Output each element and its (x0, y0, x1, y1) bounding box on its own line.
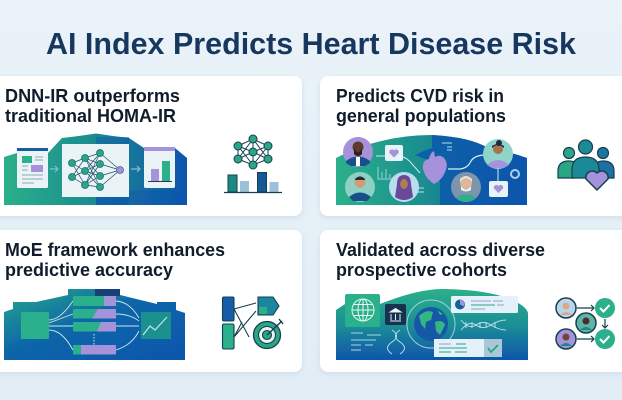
heading: CVD risk: general populations (336, 106, 506, 126)
heading: MoE: MoE framework enhances (5, 240, 225, 260)
heading: MoE: predictive accuracy (5, 260, 173, 280)
illustration: global validation (336, 289, 528, 360)
heading: cohorts: Validated across diverse (336, 240, 545, 260)
heading: CVD risk: Predicts CVD risk in (336, 86, 504, 106)
panel: MoE (0, 230, 302, 372)
illustration: neural network pipeline (4, 134, 187, 205)
icon: model to target (222, 297, 283, 349)
dna strand (388, 320, 506, 354)
heading: DNN-IR: DNN-IR outperforms (5, 86, 180, 106)
heading: cohorts: prospective cohorts (336, 260, 507, 280)
panel: CVD risk (320, 76, 622, 216)
icon: heart cards (385, 145, 519, 197)
illustration: expert mixture (4, 289, 185, 360)
avatars: people (343, 137, 513, 202)
heading: cohorts (336, 240, 545, 280)
icon: network and bars (224, 135, 282, 192)
panel: cohorts (320, 230, 622, 372)
heading: DNN-IR (5, 86, 180, 126)
heading: DNN-IR: traditional HOMA-IR (5, 106, 176, 126)
heading: MoE (5, 240, 225, 280)
panel: DNN-IR (0, 76, 302, 216)
heading: CVD risk (336, 86, 506, 126)
illustration: patient population (336, 135, 527, 205)
icon: group with heart (558, 140, 614, 190)
title: AI Index Predicts Heart Disease Risk (46, 27, 576, 61)
icon: cohort validation flow (556, 298, 615, 349)
icon: anatomical heart (423, 151, 447, 184)
